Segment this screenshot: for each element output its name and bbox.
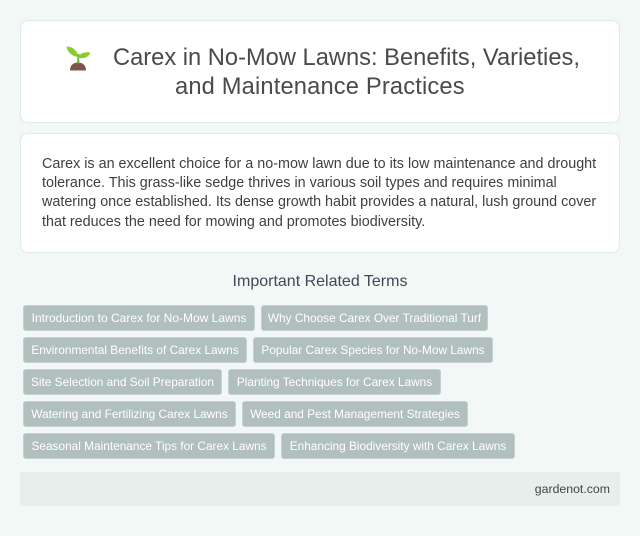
tag: Site Selection and Soil Preparation (31, 375, 214, 389)
heading line 2: and Maintenance Practices (175, 74, 465, 100)
tag: Planting Techniques for Carex Lawns (237, 375, 432, 389)
text line 1: Carex is an excellent choice for a no-mow lawn due to its low maintenance and drought (42, 156, 596, 172)
tag: Weed and Pest Management Strategies (250, 407, 460, 421)
tag: Enhancing Biodiversity with Carex Lawns (290, 439, 506, 453)
tag list (23, 305, 515, 459)
tag (23, 369, 222, 395)
tag (23, 433, 275, 459)
text line 2: tolerance. This grass-like sedge thrives in various soil types and requires minimal (42, 175, 557, 191)
heading: related terms: Important Related Terms (233, 273, 407, 290)
tag: Why Choose Carex Over Traditional Turf (268, 311, 481, 325)
tag (261, 305, 488, 331)
text line 3: watering once established. Its dense growth habit provides a natural, lush ground cover (42, 194, 596, 210)
tag (242, 401, 468, 427)
icon: seedling (66, 46, 90, 70)
footer source: gardenot.com (535, 482, 610, 496)
text line 4: that reduces the need for mowing and promotes biodiversity. (42, 214, 425, 230)
tag (281, 433, 515, 459)
panel: title card (20, 20, 620, 123)
tag (23, 305, 255, 331)
tag: Seasonal Maintenance Tips for Carex Lawns (31, 439, 267, 453)
tag: Popular Carex Species for No-Mow Lawns (261, 343, 485, 357)
tag: Introduction to Carex for No-Mow Lawns (32, 311, 246, 325)
tag (228, 369, 441, 395)
heading line 1: Carex in No-Mow Lawns: Benefits, Varieties, (113, 45, 580, 71)
tag (23, 337, 247, 363)
tag: Watering and Fertilizing Carex Lawns (31, 407, 228, 421)
tag (253, 337, 493, 363)
tag: Environmental Benefits of Carex Lawns (31, 343, 239, 357)
tag (23, 401, 236, 427)
footer bar (20, 472, 620, 506)
panel: description (20, 133, 620, 253)
